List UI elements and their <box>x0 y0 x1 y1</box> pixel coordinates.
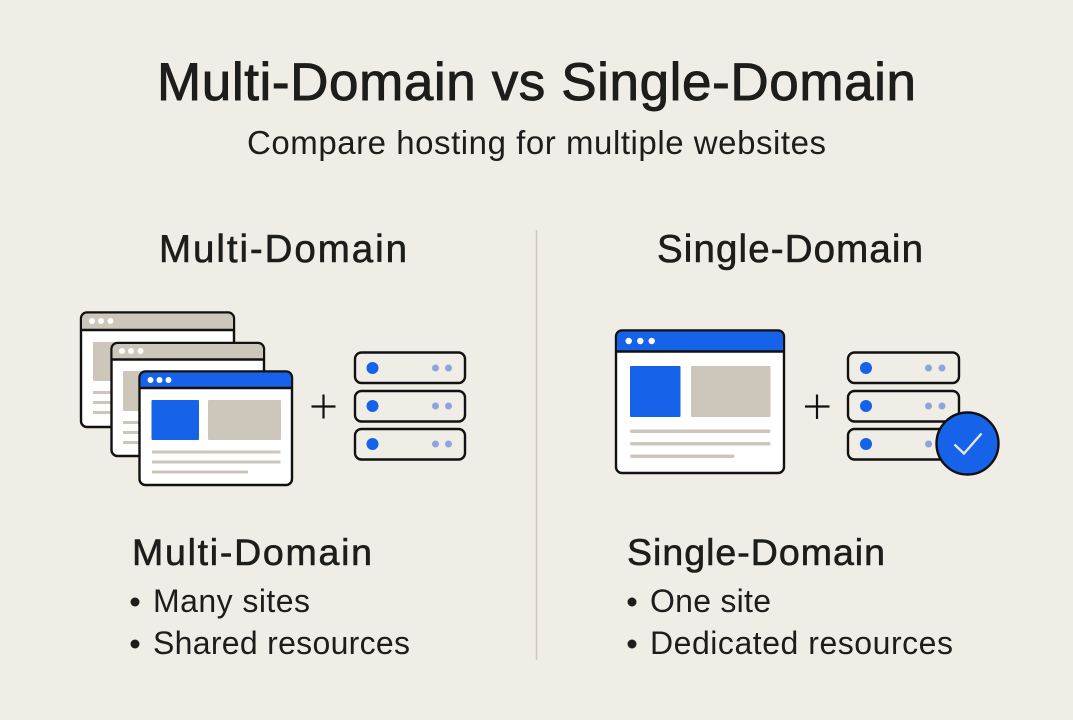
bullet list: single-domain <box>628 583 953 661</box>
panel: multi-domain <box>81 228 465 661</box>
icon: stacked browser windows <box>81 312 292 485</box>
front window <box>140 372 292 485</box>
bullet list: multi-domain: Many sites <box>153 583 310 619</box>
bullet list: multi-domain: Shared resources <box>153 625 410 661</box>
subheading: multi-domain: Multi-Domain <box>132 531 372 573</box>
middle window <box>112 343 264 456</box>
bullet list: single-domain: Dedicated resources <box>650 625 953 661</box>
subheading: single-domain: Single-Domain <box>627 531 885 573</box>
panel: single-domain <box>616 228 998 661</box>
icon: check badge <box>936 412 998 474</box>
icon: plus <box>805 394 830 419</box>
bullet list: single-domain: One site <box>650 583 771 619</box>
icon: plus <box>312 394 336 418</box>
subtitle: Compare hosting for multiple websites <box>247 124 826 161</box>
icon: browser window <box>616 330 784 473</box>
icon: server stack <box>848 352 959 460</box>
heading: single-domain: Single-Domain <box>657 228 923 271</box>
icon: server stack <box>355 352 465 460</box>
bullet list: multi-domain <box>130 583 410 661</box>
title: Multi-Domain vs Single-Domain <box>157 53 916 112</box>
heading: multi-domain: Multi-Domain <box>159 228 407 271</box>
back window <box>81 312 234 427</box>
